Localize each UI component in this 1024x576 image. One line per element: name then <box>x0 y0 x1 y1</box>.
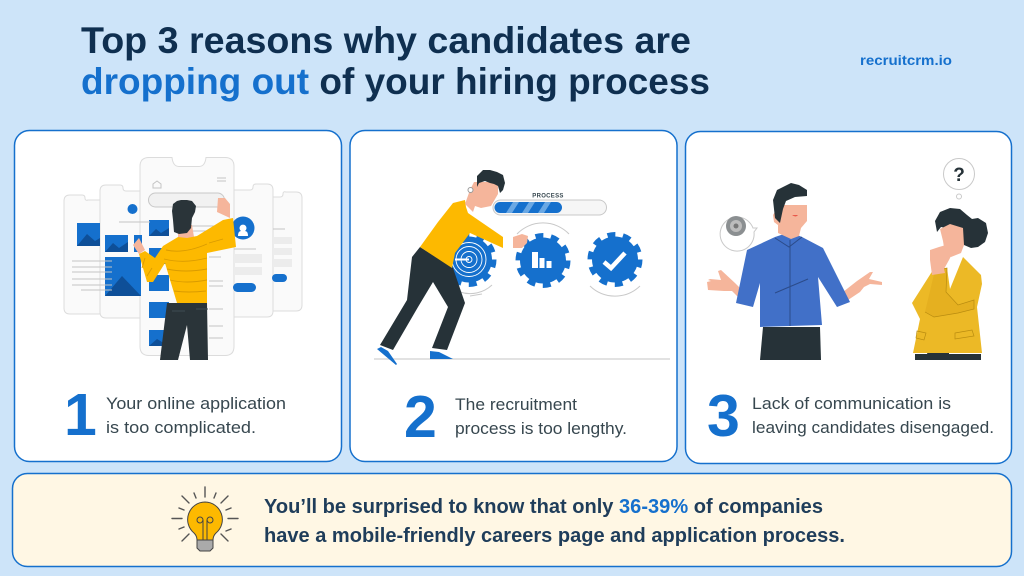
man <box>707 270 882 302</box>
title: dropping out of your hiring process <box>81 61 710 102</box>
number 1: 1 <box>64 382 97 448</box>
text: reason 3: Lack of communication is <box>752 395 951 413</box>
thought bubble: ? <box>953 165 965 186</box>
title <box>81 20 710 102</box>
thought bubble <box>944 158 974 199</box>
woman <box>935 208 988 248</box>
text: reason 2 <box>455 396 627 438</box>
text: fact: You’ll be surprised to know that only 36-39% of companies <box>264 496 823 518</box>
text: reason 2: The recruitment <box>455 396 577 414</box>
illustration: man and woman talking <box>707 158 988 360</box>
icon: light bulb <box>172 487 238 551</box>
text: reason 2: process is too lengthy. <box>455 420 627 438</box>
panel: reason 3 <box>686 132 1012 464</box>
brand: recruitcrm.io: recruitcrm.io <box>860 52 952 68</box>
gears <box>444 234 640 286</box>
panel: fact callout <box>12 474 1012 566</box>
panel: reason 2 <box>350 130 677 462</box>
text: reason 1: Your online application <box>106 395 286 413</box>
title: Top 3 reasons why candidates are <box>81 20 691 61</box>
person <box>380 247 465 350</box>
text: reason 3: leaving candidates disengaged. <box>752 419 994 437</box>
progress bar: PROCESS <box>532 194 564 200</box>
text: fact <box>264 496 845 547</box>
illustration: person browsing phone screens <box>64 158 302 360</box>
progress bar <box>493 194 606 215</box>
number 3: 3 <box>707 383 740 449</box>
text: fact: have a mobile-friendly careers page and application process. <box>264 525 845 547</box>
speech bubble <box>720 216 757 251</box>
text: reason 1 <box>106 395 286 437</box>
panel: reason 1 <box>14 130 342 462</box>
number 2: 2 <box>404 384 437 450</box>
text: reason 3 <box>752 395 994 437</box>
illustration: person pushing gears <box>374 170 670 365</box>
text: reason 1: is too complicated. <box>106 419 256 437</box>
